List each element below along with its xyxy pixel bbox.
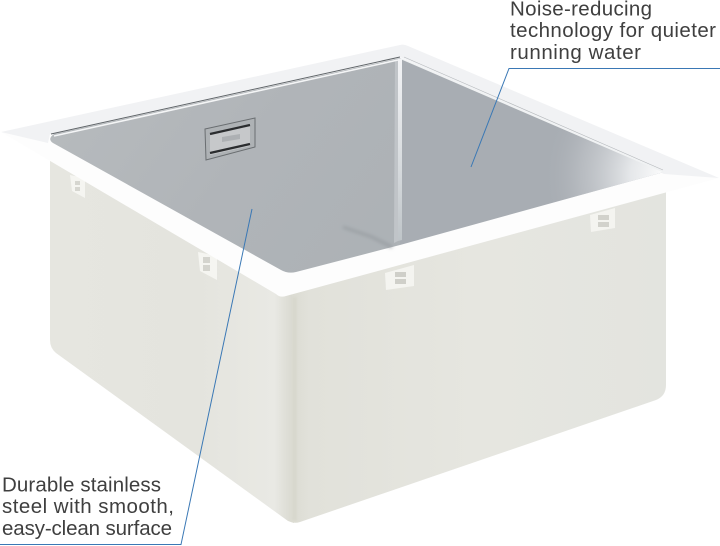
rim upper face — [1, 45, 719, 178]
upper left edge shadow — [51, 57, 400, 134]
label text: running water — [510, 41, 641, 64]
label text: steel with smooth, — [2, 495, 174, 518]
clip 4 — [590, 208, 615, 232]
corner outer band — [394, 59, 398, 243]
waste cover — [205, 118, 255, 160]
floor seam shadow — [343, 227, 392, 247]
upper left edge lip — [54, 60, 398, 136]
white rim — [1, 45, 719, 297]
mounting clips — [70, 175, 615, 290]
label text: technology for quieter — [510, 19, 716, 42]
callout: durable stainless steel — [0, 209, 252, 544]
callout: noise-reducing technology — [471, 0, 720, 167]
leader line — [0, 209, 252, 544]
clip 3 — [385, 265, 414, 290]
body corner crease — [292, 297, 297, 521]
leader line — [471, 68, 720, 167]
corner white band — [398, 58, 402, 241]
upper right edge highlight — [402, 59, 664, 172]
left outer face — [50, 160, 300, 523]
upper right edge line — [404, 57, 663, 170]
clip 1 — [70, 175, 85, 198]
right wall highlight — [400, 58, 664, 245]
clip 2 — [198, 252, 217, 280]
front outer face — [289, 190, 666, 523]
left wall and floor — [50, 58, 400, 273]
right wall — [400, 58, 664, 245]
label text: easy-clean surface — [2, 517, 172, 540]
label text — [510, 0, 716, 64]
rim lower face — [1, 45, 719, 297]
sink body — [50, 160, 666, 523]
label text: Durable stainless — [2, 474, 161, 496]
steel basin — [50, 57, 664, 273]
label text — [2, 474, 174, 540]
